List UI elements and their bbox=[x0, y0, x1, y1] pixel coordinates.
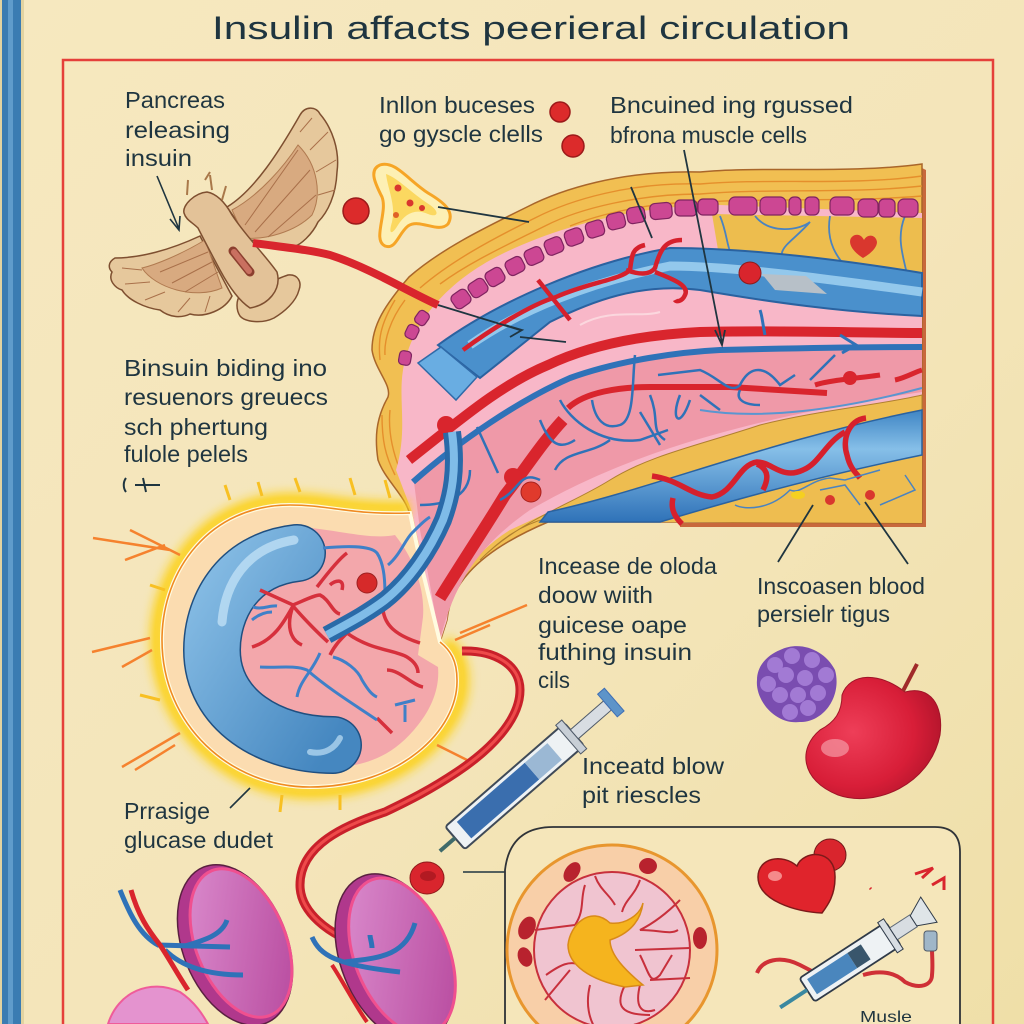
label: pancreas releasing insulin: insuin bbox=[125, 145, 192, 171]
glow bbox=[157, 500, 462, 792]
vessel end block bbox=[418, 347, 477, 400]
icon: syringe bbox=[427, 685, 627, 865]
label: increased blow: pit riescles bbox=[582, 782, 701, 808]
label: pancreas releasing insulin: releasing bbox=[125, 117, 230, 143]
label: increase blood flow: futhing insuin bbox=[538, 639, 692, 665]
label: insulin binding bbox=[124, 355, 328, 467]
small arrow symbol bbox=[124, 478, 160, 492]
label: insulin binding: fulole pelels bbox=[124, 441, 248, 467]
label: bound insulin muscle cells: Bncuined ing rgussed bbox=[610, 92, 853, 118]
long red artery bbox=[409, 331, 922, 460]
fine vessels in yellow bbox=[720, 216, 908, 280]
label: pressure glucose duct: glucase dudet bbox=[124, 827, 274, 853]
label: increased blood peripheral tissue: Inscoasen blood bbox=[757, 573, 925, 599]
blue mesh bbox=[420, 420, 610, 505]
red cells top bbox=[343, 102, 584, 224]
lower large blue vessel bbox=[540, 410, 922, 522]
label: insulin buses glucose bbox=[379, 92, 543, 147]
tail bbox=[237, 275, 300, 322]
label: increase blood flow: Incease de oloda bbox=[538, 553, 717, 579]
red cell bbox=[357, 573, 377, 593]
small syringe bbox=[770, 895, 939, 1023]
yellow fat lower band bbox=[480, 395, 922, 560]
title: Insulin affacts peerieral circulation bbox=[212, 10, 850, 46]
label: bound insulin muscle cells bbox=[610, 92, 853, 148]
kidney right bbox=[312, 856, 478, 1024]
upper large blue vessel bbox=[438, 248, 922, 378]
left wing bbox=[109, 236, 232, 317]
label: increase blood flow: guicese oape bbox=[538, 612, 687, 638]
inset panel bbox=[505, 827, 960, 1024]
blue filigree bbox=[560, 355, 835, 445]
label: insulin binding: Binsuin biding ino bbox=[124, 355, 327, 381]
blue branches bbox=[252, 517, 430, 722]
inset tube cap bbox=[924, 931, 937, 951]
body bbox=[184, 192, 278, 308]
icon: bird shaped pancreas bbox=[109, 108, 338, 322]
red veins on upper vessel bbox=[463, 240, 686, 350]
tissue cross-section panel bbox=[372, 164, 926, 642]
label: increased blow bbox=[582, 753, 724, 808]
antennae bbox=[187, 172, 226, 200]
pink cell row bbox=[398, 197, 918, 366]
tissue shadow bbox=[680, 168, 926, 527]
fat stripes bbox=[379, 176, 922, 475]
label: increase blood flow bbox=[538, 553, 717, 693]
kidney left bbox=[120, 848, 315, 1024]
blue vessel from tissue bbox=[327, 432, 454, 635]
small red marks bbox=[870, 868, 944, 890]
pink core bbox=[230, 527, 438, 765]
capsule bbox=[233, 251, 250, 272]
spikes bbox=[140, 478, 390, 812]
label: pancreas releasing insulin bbox=[125, 87, 230, 171]
red ball and grey needle bbox=[762, 274, 827, 294]
kidney bottom left bbox=[108, 987, 208, 1024]
label: insulin binding: sch phertung bbox=[124, 414, 268, 440]
heart cell bbox=[850, 235, 877, 258]
label: increased blow: Inceatd blow bbox=[582, 753, 724, 779]
label: insulin buses glucose: Inllon buceses bbox=[379, 92, 535, 118]
icon: small yellow gland bbox=[374, 164, 450, 247]
arrows to tissue bbox=[438, 150, 908, 564]
thin blue vessel bbox=[413, 347, 922, 482]
label: insulin binding: resuenors greuecs bbox=[124, 384, 328, 410]
artery from bird to tissue bbox=[253, 243, 438, 305]
lower yellow details bbox=[735, 470, 915, 508]
label: insulin buses glucose: go gyscle clells bbox=[379, 121, 543, 147]
red tube inset bbox=[757, 950, 932, 986]
label: increase blood flow: doow wiith bbox=[538, 582, 653, 608]
winding red vessel on lower vessel bbox=[652, 418, 866, 524]
label: pressure glucose duct bbox=[124, 798, 274, 853]
pancreas organ with glow bbox=[92, 432, 527, 812]
body bbox=[162, 505, 457, 787]
arrow: pancreas label to bird bbox=[157, 176, 180, 230]
label: bound insulin muscle cells: bfrona muscle cells bbox=[610, 122, 807, 148]
label: increased blood peripheral tissue: persielr tigus bbox=[757, 601, 890, 627]
red blood cell bbox=[410, 862, 506, 894]
yellow upper right region bbox=[712, 214, 922, 282]
cross-section disc bbox=[507, 845, 717, 1024]
left blue band bbox=[0, 0, 24, 1024]
icon: red apple bbox=[806, 664, 941, 799]
icon: heart bbox=[758, 839, 846, 913]
red branches bbox=[252, 553, 423, 733]
icon: purple grapes bbox=[757, 646, 837, 722]
label: increase blood flow: cils bbox=[538, 667, 570, 693]
lower deep pink band bbox=[414, 345, 922, 640]
right wing bbox=[227, 108, 338, 246]
curved red tube bbox=[300, 651, 520, 948]
yellow fat outer bbox=[372, 164, 922, 642]
blue C bbox=[212, 553, 333, 745]
label: increased blood peripheral tissue bbox=[757, 573, 925, 627]
label: pancreas releasing insulin: Pancreas bbox=[125, 87, 225, 113]
pink fold under upper vessel bbox=[580, 312, 660, 325]
label: pressure glucose duct: Prrasige bbox=[124, 798, 210, 824]
pink tissue bbox=[396, 205, 922, 642]
descending red vessel bbox=[440, 420, 563, 598]
lower yellow area bbox=[640, 450, 922, 523]
mid red vessel bbox=[568, 387, 827, 408]
